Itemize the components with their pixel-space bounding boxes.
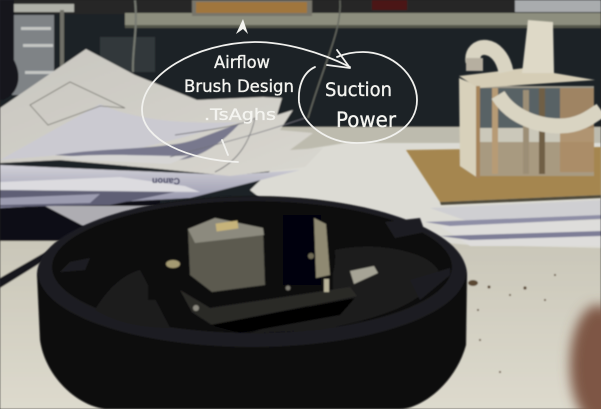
debris specks (468, 274, 556, 373)
clear box (459, 68, 595, 178)
cavity (52, 201, 452, 333)
arrow: up (236, 19, 248, 34)
tick mark (222, 140, 228, 155)
circle: suction power (299, 52, 417, 143)
rim tabs (60, 258, 90, 272)
label: Suction: Suction (325, 80, 392, 101)
label: Brush Design: Brush Design (184, 77, 294, 96)
label: Insights: .TsAghs (204, 105, 276, 124)
label: Power: Power (336, 108, 396, 132)
loop: airflow and brush design, ending in arrow (142, 42, 350, 162)
cardboard base (406, 147, 601, 202)
outer body (37, 196, 467, 409)
top rim (38, 197, 466, 347)
hoses (473, 47, 601, 126)
chair (0, 0, 19, 100)
white tab (350, 266, 378, 284)
tray of orange material on shelf (192, 0, 312, 16)
pencil on table (0, 238, 74, 288)
table surface (280, 127, 601, 157)
mounting plate (180, 287, 357, 325)
metal gearbox (188, 218, 265, 292)
washer (166, 260, 180, 268)
label: Airflow: Airflow (214, 53, 270, 73)
handwritten diagram overlay (142, 19, 417, 162)
drawings on table (250, 143, 601, 248)
prototype model: cardboard base and box with hoses (406, 20, 601, 205)
beige bracket (314, 218, 330, 278)
black motor housing (148, 225, 333, 300)
desk and drawers at left (12, 4, 74, 95)
stack of paper: Canon (152, 176, 180, 186)
stack of paper (0, 49, 323, 233)
robot vacuum (37, 196, 467, 409)
blurred finger in foreground (570, 305, 601, 409)
